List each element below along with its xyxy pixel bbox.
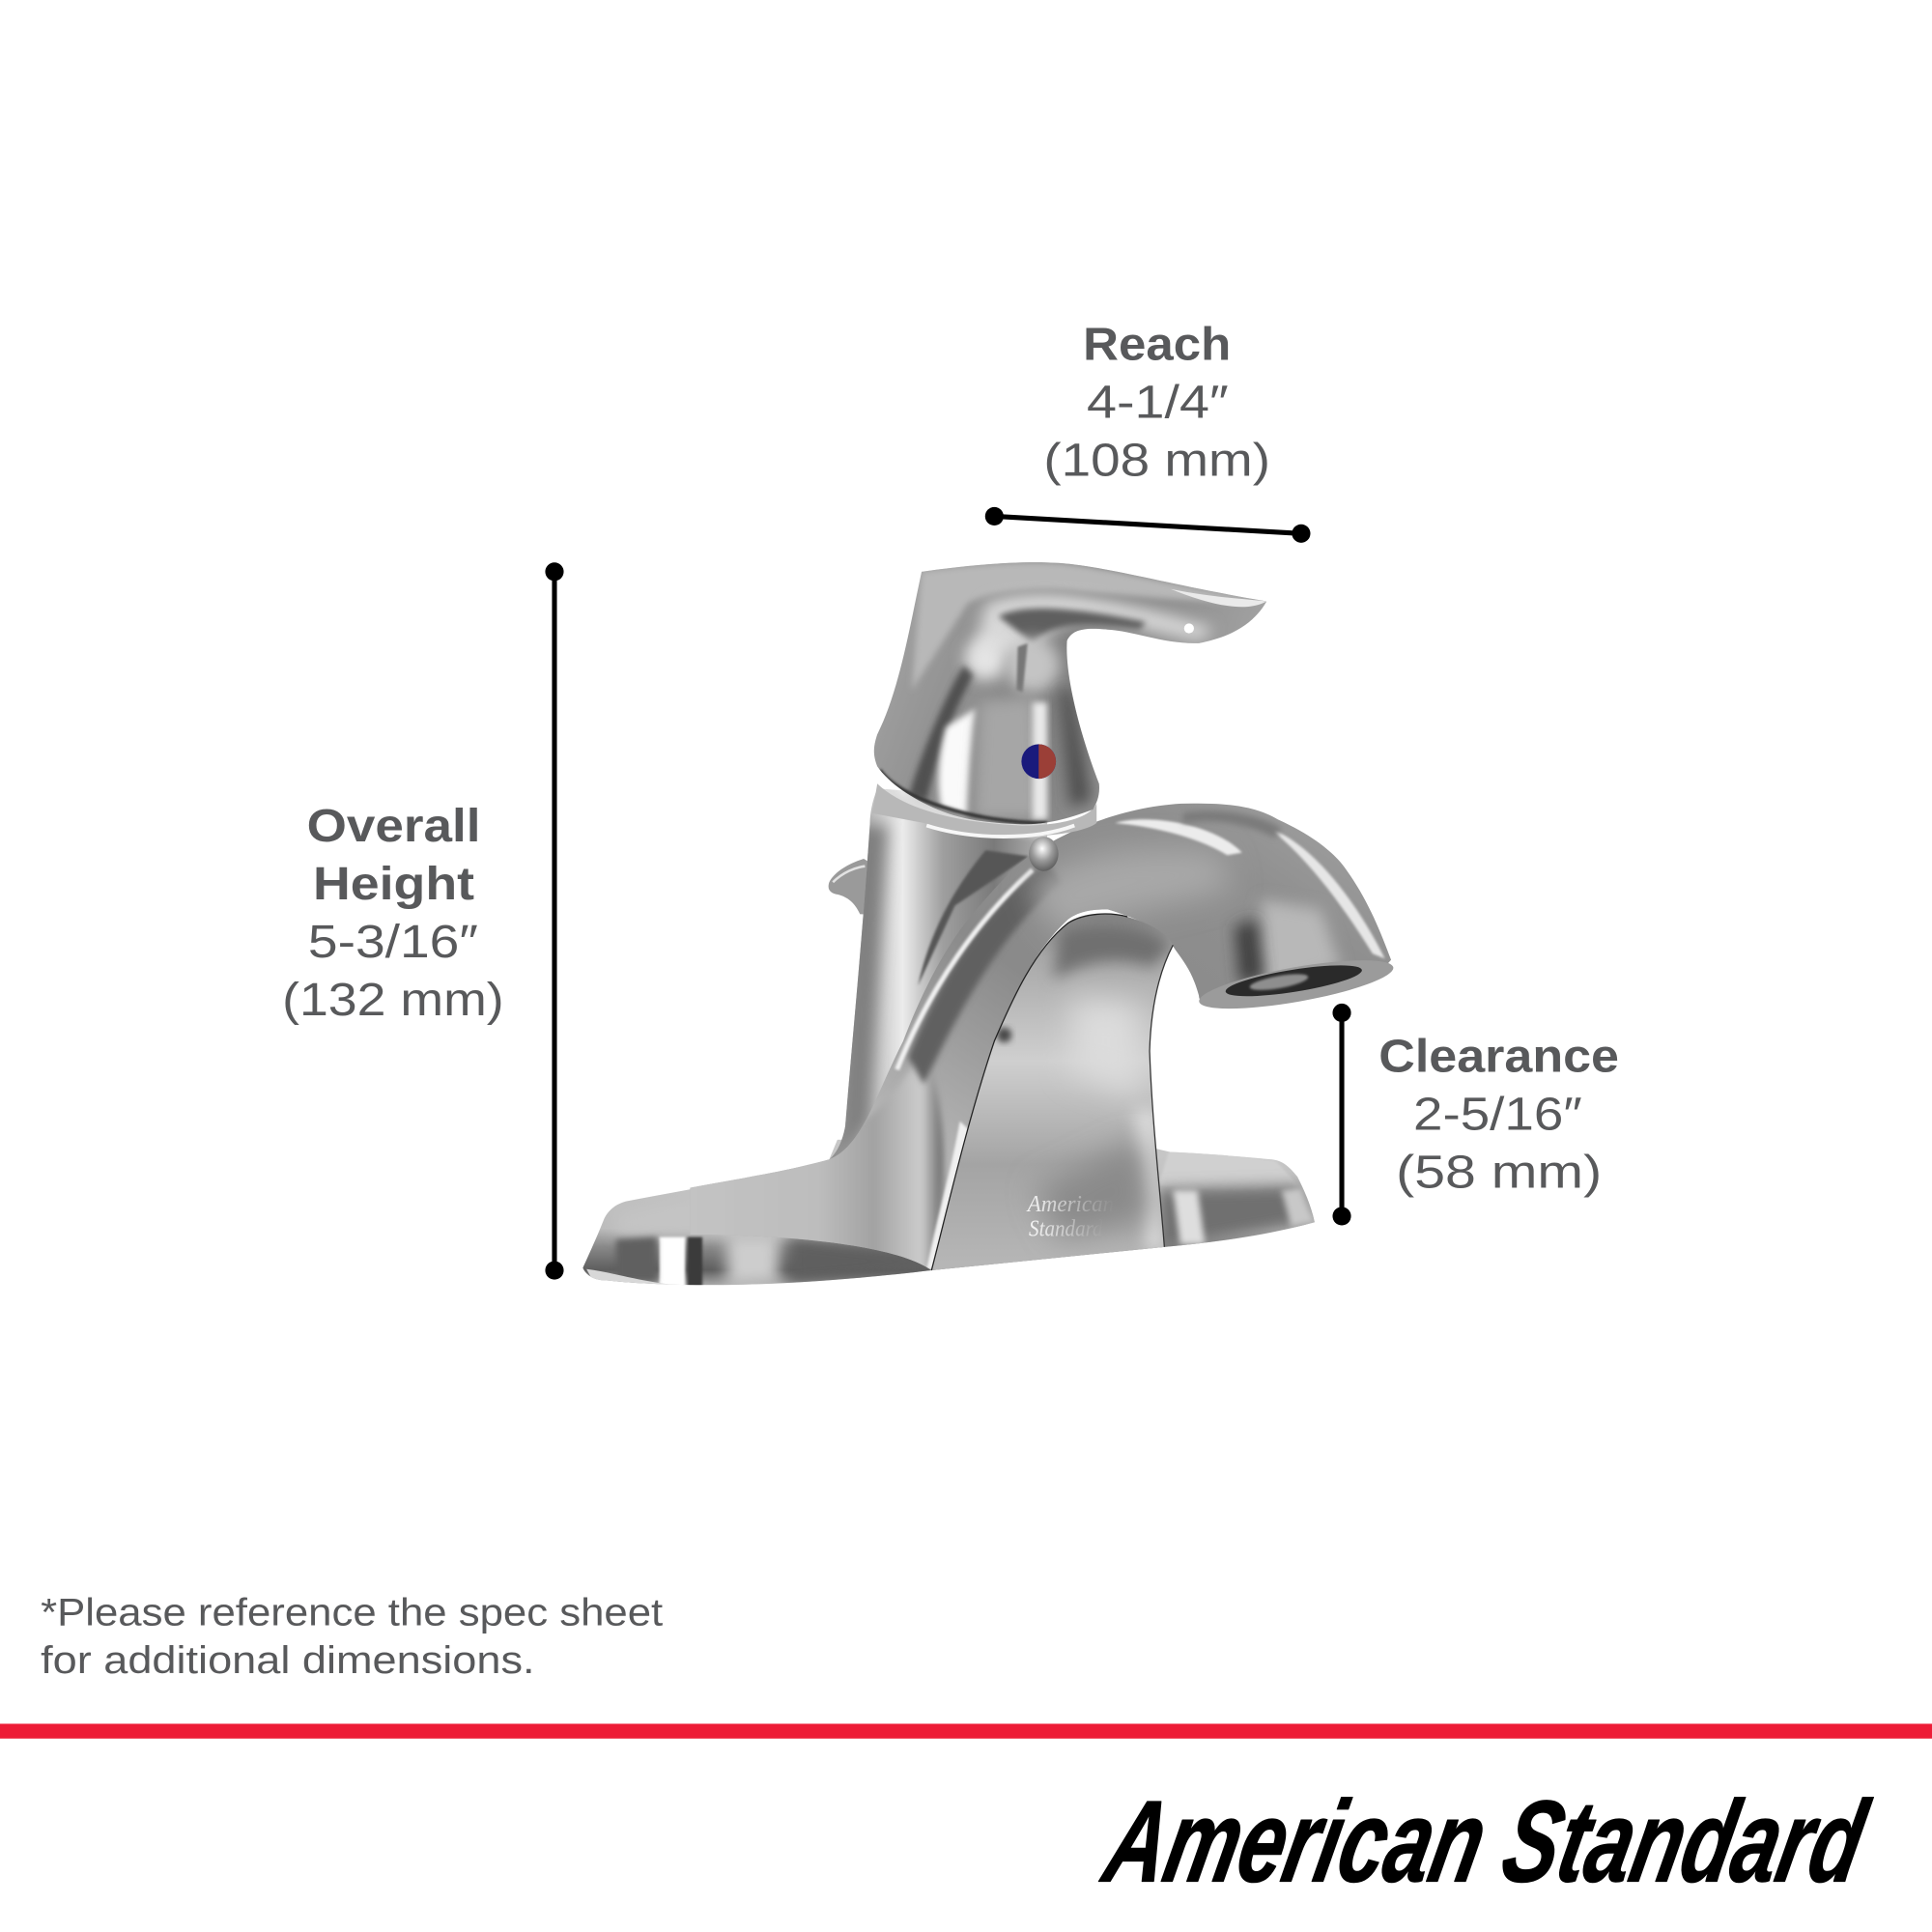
plate brand mark: American xyxy=(1026,1191,1114,1217)
footnote xyxy=(41,1591,663,1682)
faucet: collar xyxy=(872,783,1096,837)
faucet: drain lift rod xyxy=(829,859,870,914)
faucet: vertical body xyxy=(829,788,1047,1159)
faucet illustration xyxy=(567,554,1405,1289)
label: overall height: 5-3/16″ xyxy=(308,916,478,968)
faucet: temperature indicator xyxy=(1021,744,1056,779)
plate brand mark xyxy=(1026,1191,1114,1241)
red divider bar xyxy=(0,1723,1932,1739)
label: reach: Reach xyxy=(1083,318,1231,370)
faucet: handle xyxy=(873,562,1266,825)
footnote: for additional dimensions. xyxy=(41,1639,535,1682)
label: overall height: (132 mm) xyxy=(282,974,504,1026)
plate brand mark: Standard xyxy=(1029,1215,1103,1241)
label: clearance xyxy=(1378,1031,1619,1199)
footnote: *Please reference the spec sheet xyxy=(41,1591,663,1634)
label: reach: (108 mm) xyxy=(1043,434,1270,486)
faucet: spout and flowing neck xyxy=(690,804,1391,1270)
faucet: cover plate xyxy=(924,906,1182,1275)
label: overall height xyxy=(282,800,504,1026)
faucet: valve ball xyxy=(1029,837,1059,871)
label: clearance: 2-5/16″ xyxy=(1413,1089,1582,1141)
faucet: base plate xyxy=(567,1140,1331,1289)
label: overall height: Height xyxy=(313,858,474,910)
label: overall height: Overall xyxy=(307,800,480,852)
faucet: aerator xyxy=(1196,951,1396,1018)
label: reach: 4-1/4″ xyxy=(1087,376,1229,428)
dimension line: reach xyxy=(985,507,1311,543)
label: reach xyxy=(1043,318,1270,486)
dimension line: overall height xyxy=(545,562,564,1280)
label: clearance: Clearance xyxy=(1378,1031,1619,1083)
dimension line: clearance xyxy=(1332,1004,1351,1225)
label: clearance: (58 mm) xyxy=(1396,1147,1602,1199)
